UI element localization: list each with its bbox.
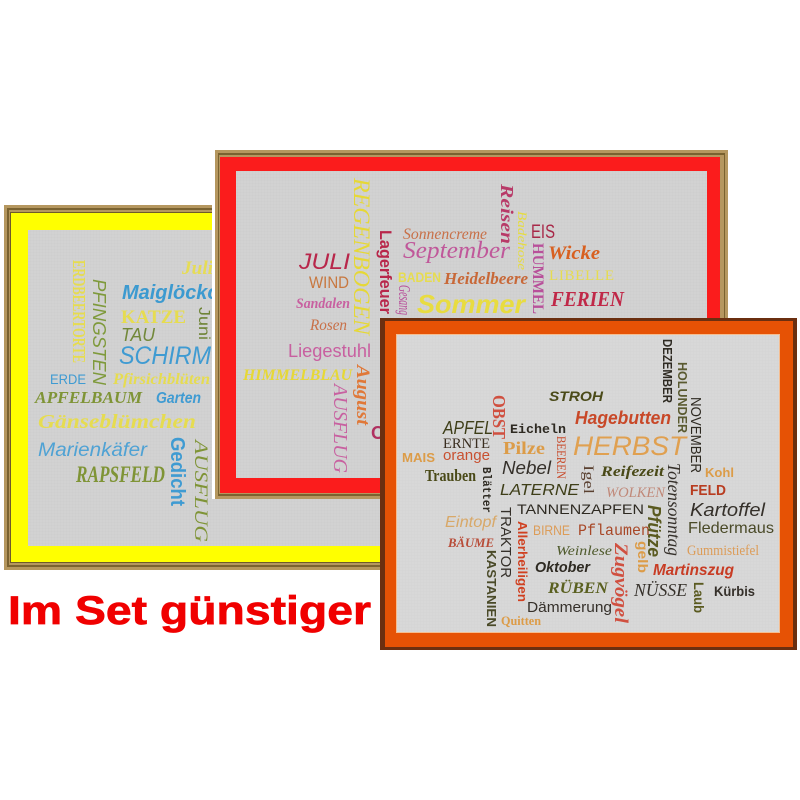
word: SCHIRM: SCHIRM [119, 342, 211, 370]
word: Gänseblümchen: Gänseblümchen [38, 411, 196, 433]
word: Gesang: Gesang [395, 285, 414, 315]
word: TRAKTOR: TRAKTOR [497, 507, 514, 578]
word: WIND: WIND [309, 273, 349, 292]
word: gelb: gelb [635, 541, 651, 573]
word: orange: orange [443, 447, 490, 464]
word: Igel: Igel [580, 465, 596, 494]
word: Fledermaus: Fledermaus [688, 520, 774, 537]
word: HUMMEL: HUMMEL [529, 243, 546, 314]
frame: red panel [212, 148, 728, 499]
word: Allerheiligen: Allerheiligen [515, 521, 530, 602]
word: EIS: EIS [531, 222, 555, 243]
word: Pfirsichblüten: Pfirsichblüten [112, 371, 210, 388]
word: HIMMELBLAU: HIMMELBLAU [242, 367, 353, 384]
word: AUSFLUG: AUSFLUG [190, 438, 211, 542]
word: WOLKEN: WOLKEN [606, 485, 666, 501]
word: Reifezeit: Reifezeit [600, 464, 665, 480]
word: AUSFLUG: AUSFLUG [329, 382, 351, 474]
word: KASTANIEN: KASTANIEN [484, 550, 499, 627]
word: LATERNE: LATERNE [500, 482, 579, 499]
heading: Im Set günstiger: Im Set günstiger [8, 589, 371, 633]
word: DEZEMBER: DEZEMBER [660, 339, 675, 404]
word: APFELBAUM: APFELBAUM [34, 388, 143, 407]
word: Garten: Garten [156, 390, 201, 407]
word: Weinlese: Weinlese [556, 544, 612, 559]
word: BADEN: BADEN [398, 269, 441, 285]
word: Laub: Laub [691, 582, 707, 613]
word: Pflaumen: Pflaumen [578, 522, 650, 540]
word: PFINGSTEN: PFINGSTEN [89, 279, 109, 386]
word: Sommer: Sommer [417, 289, 527, 319]
word: HOLUNDER: HOLUNDER [675, 362, 690, 434]
word: OBST: OBST [489, 395, 509, 439]
word: Gedicht: Gedicht [166, 437, 188, 506]
word: Sonnencreme: Sonnencreme [403, 226, 487, 243]
word: Kürbis: Kürbis [714, 583, 755, 599]
word: Juli: Juli [181, 258, 214, 279]
word: Eintopf: Eintopf [445, 514, 498, 531]
word: Pilze: Pilze [503, 438, 545, 458]
word: September: September [403, 238, 511, 264]
panel: yellow spring word art in frame [4, 205, 404, 570]
word: Blätter: Blätter [479, 467, 493, 513]
word: Pfütze: Pfütze [644, 505, 664, 557]
word: BÄUME: BÄUME [447, 535, 494, 550]
word: ERNTE: ERNTE [443, 436, 490, 452]
word: Liegestuhl: Liegestuhl [288, 341, 371, 361]
word: Hagebutten: Hagebutten [575, 408, 671, 428]
word: Heidelbeere: Heidelbeere [443, 269, 528, 288]
word: Ostern: O [371, 423, 385, 443]
word: Gummistiefel: Gummistiefel [687, 543, 759, 559]
word: LIBELLE: LIBELLE [549, 268, 614, 284]
word: Kohl: Kohl [705, 465, 734, 480]
word: Eicheln: Eicheln [510, 422, 566, 437]
word: Oktober: Oktober [535, 559, 591, 576]
word: Rosen: Rosen [309, 317, 347, 334]
word: STROH: STROH [549, 388, 604, 404]
word: TAU: TAU [121, 325, 156, 345]
word: August: August [352, 364, 373, 426]
word: Marienkäfer: Marienkäfer [38, 440, 148, 461]
word: MAIS: MAIS [402, 450, 435, 465]
panel: orange autumn word art in frame [380, 318, 797, 650]
word: NOVEMBER: NOVEMBER [687, 397, 704, 473]
word: Kartoffel: Kartoffel [690, 500, 766, 520]
word: Juni: Juni [195, 307, 212, 340]
word: Trauben: Trauben [425, 466, 476, 485]
word: Badehose: Badehose [515, 211, 530, 270]
frame: yellow panel [4, 205, 404, 570]
word: Sandalen: Sandalen [296, 296, 350, 312]
word: KATZE: KATZE [121, 307, 186, 328]
word: APFEL: APFEL [442, 418, 493, 438]
panel: red summer word art in frame [212, 148, 728, 499]
word: Maiglöckchen: Maiglöckchen [122, 282, 254, 304]
word: FERIEN: FERIEN [550, 287, 625, 311]
word: RÜBEN: RÜBEN [547, 579, 610, 597]
word: Zugvögel: Zugvögel [610, 542, 631, 624]
word: Reisen: Reisen [497, 183, 517, 244]
word: REGENBOGEN: REGENBOGEN [349, 177, 374, 337]
word: JULI: JULI [298, 249, 350, 274]
word: HERBST: HERBST [573, 431, 689, 461]
word: Dämmerung: Dämmerung [527, 599, 612, 616]
word: Totensonntag: Totensonntag [664, 463, 684, 556]
word: Quitten: Quitten [501, 613, 542, 628]
word: Martinszug: Martinszug [653, 562, 734, 579]
word: Nebel: Nebel [502, 458, 552, 478]
word: NÜSSE: NÜSSE [633, 580, 687, 600]
word: Wicke: Wicke [548, 243, 601, 264]
word: FELD: FELD [690, 482, 726, 499]
word: BIRNE: BIRNE [533, 522, 570, 538]
word: TANNENZAPFEN: TANNENZAPFEN [517, 501, 644, 517]
frame: orange panel [380, 318, 797, 650]
word: BEEREN: BEEREN [554, 436, 569, 480]
word: RAPSFELD: RAPSFELD [75, 462, 165, 487]
word: Lagerfeuer: Lagerfeuer [376, 230, 395, 314]
word: ERDE: ERDE [50, 371, 86, 387]
word: ERDBEERTORTE: ERDBEERTORTE [69, 260, 89, 363]
